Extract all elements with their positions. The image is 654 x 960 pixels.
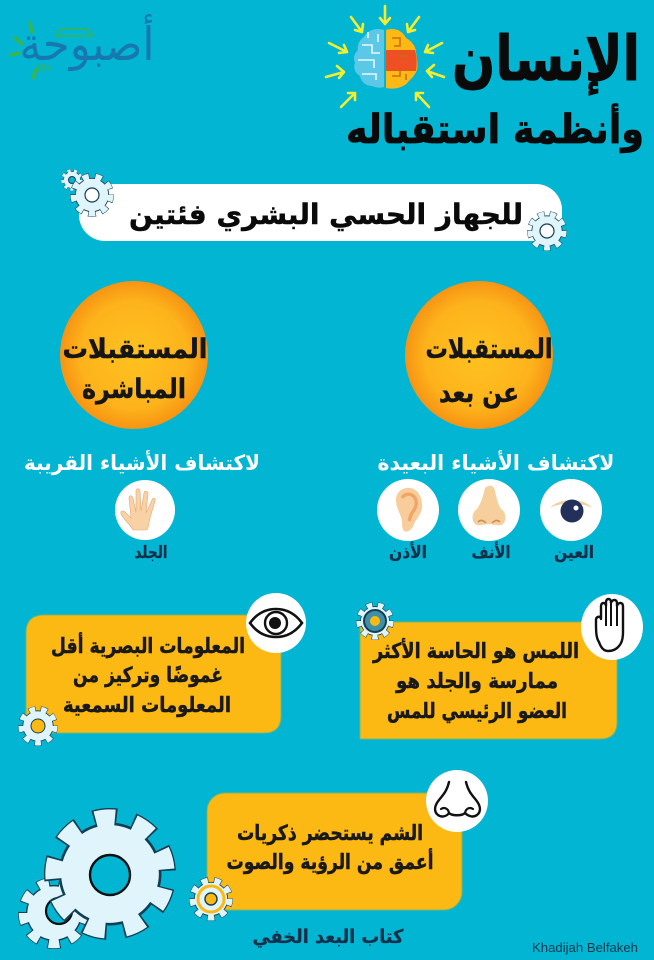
logo: أصبوحة	[20, 14, 154, 72]
circle: distance receptors: عن بعد	[439, 378, 519, 409]
icon: gear	[193, 881, 229, 917]
panel: smell callout: أعمق من الرؤية والصوت	[226, 847, 434, 874]
subtitle text: للجهاز الحسي البشري فئتين	[129, 198, 523, 231]
panel: vision callout: غموضًا وتركيز من	[73, 663, 223, 687]
icon: brain with arrows	[326, 6, 444, 107]
icon: small decorative gear bottom left	[24, 883, 84, 943]
icon: eye	[540, 479, 602, 541]
icon: gear at subtitle right	[530, 214, 564, 248]
panel: smell callout	[193, 770, 488, 917]
icon: eye outline	[246, 593, 306, 653]
circle: direct receptors: المباشرة	[82, 374, 186, 405]
label: skin: الجلد	[134, 543, 168, 563]
icon: nose	[458, 479, 520, 541]
icon: gears at subtitle left	[63, 171, 110, 213]
label: ear: الأذن	[389, 542, 427, 563]
icon: hand outline	[581, 594, 643, 660]
label: eye: العين	[554, 543, 594, 563]
icon: large gear bottom left	[42, 806, 178, 942]
circle: direct receptors	[60, 281, 208, 429]
icon: ear	[377, 479, 439, 541]
title	[346, 22, 644, 153]
panel: touch callout: ممارسة والجلد هو	[395, 669, 558, 693]
panel: touch callout	[359, 594, 643, 739]
circle: direct receptors: المستقبلات	[62, 334, 208, 365]
panel: vision callout: المعلومات البصرية أقل	[51, 631, 245, 658]
panel: vision callout: المعلومات السمعية	[63, 693, 231, 717]
panel: smell callout: الشم يستحضر ذكريات	[237, 821, 423, 845]
heading: near objects: لاكتشاف الأشياء القريبة	[24, 449, 260, 475]
source: كتاب البعد الخفي	[252, 926, 404, 948]
icon: hand	[115, 480, 175, 540]
icon: gear	[21, 709, 55, 743]
credit: Khadijah Belfakeh	[532, 941, 638, 955]
panel: touch callout: اللمس هو الحاسة الأكثر	[372, 637, 579, 663]
panel: touch callout: العضو الرئيسي للمس	[387, 699, 567, 723]
heading: far objects: لاكتشاف الأشياء البعيدة	[378, 449, 614, 475]
circle: distance receptors: المستقبلات	[426, 334, 552, 365]
panel: vision callout	[21, 593, 306, 743]
icon: nose outline	[426, 770, 488, 832]
logo: 18+	[36, 63, 51, 73]
panel: subtitle pill	[79, 184, 562, 241]
icon: gear	[359, 605, 391, 637]
circle: distance receptors	[405, 281, 553, 429]
label: nose: الأنف	[472, 542, 510, 563]
